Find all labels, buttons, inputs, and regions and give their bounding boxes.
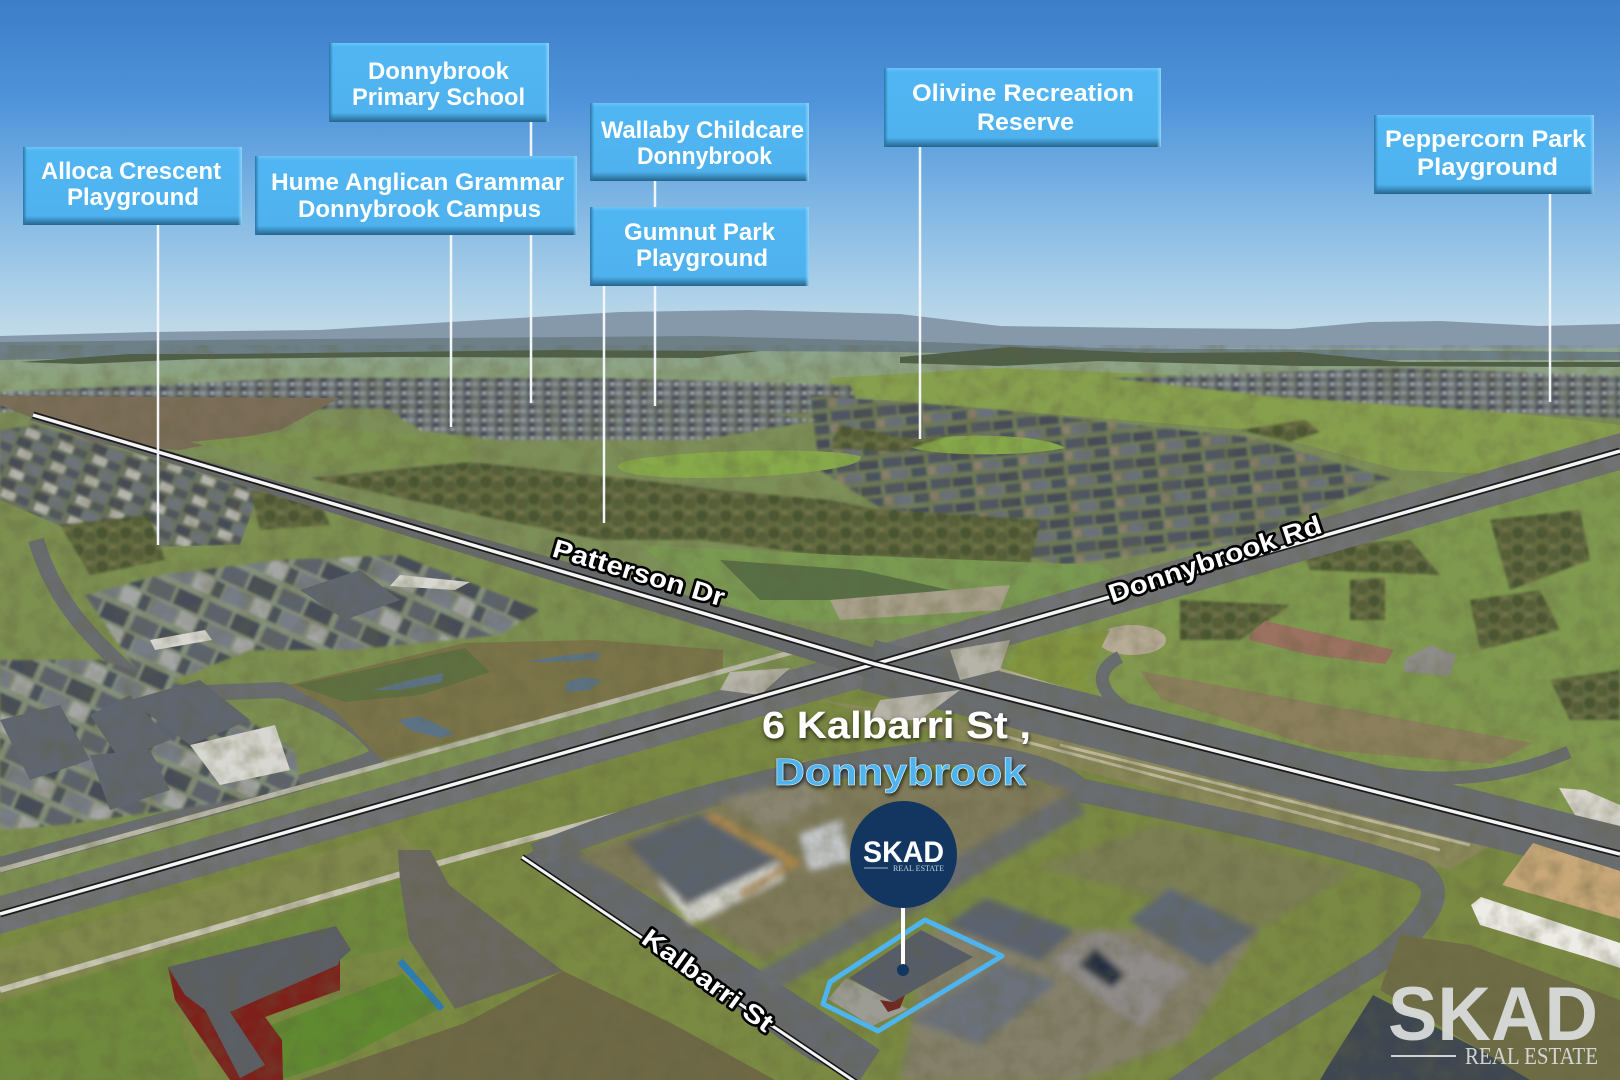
label: Hume Anglican Grammar	[255, 156, 577, 235]
Kalbarri St road	[522, 838, 880, 1080]
right field	[880, 450, 1620, 855]
school buildings	[380, 400, 820, 440]
far suburb right	[1110, 368, 1620, 418]
blurred white wall	[655, 861, 785, 925]
Donnybrook Rd dark kerb	[0, 451, 1620, 914]
line: Peppercorn	[1549, 194, 1551, 402]
lot lower	[900, 930, 1260, 1080]
Patterson Dr carriageway right	[860, 640, 1620, 880]
label: Hume Anglican Grammar: Hume Anglican Grammar	[271, 169, 564, 196]
houses roofs	[0, 570, 400, 810]
blurred fence	[710, 816, 795, 895]
address line 1: 6 Kalbarri St ,	[762, 705, 1031, 747]
grain	[0, 345, 1620, 1080]
cleared dirt	[0, 396, 340, 450]
blurred house A	[945, 898, 1075, 962]
Patterson Dr median	[33, 415, 1620, 854]
label: Alloca Crescent Playground: Alloca Crescent	[41, 158, 221, 185]
suburb cluster lower	[0, 660, 300, 830]
label: Donnybrook Primary School	[329, 43, 549, 122]
address title	[762, 705, 1031, 794]
trees along park	[310, 420, 1320, 565]
right wedge dirt lot	[1140, 671, 1533, 764]
pointer lines	[158, 122, 1550, 545]
location pin stem	[901, 905, 905, 966]
label: Donnybrook Primary School: Donnybrook	[368, 58, 510, 85]
ground base	[0, 400, 1620, 1080]
suburb street left	[0, 540, 380, 865]
parkland	[640, 545, 1120, 625]
label: Olivine Recreation Reserve	[884, 68, 1161, 147]
label: Olivine Recreation Reserve: Reserve	[977, 109, 1074, 136]
line: Hume	[450, 235, 452, 427]
park to right wedge	[1110, 470, 1620, 760]
watermark logo	[1388, 972, 1598, 1070]
label: Wallaby Childcare: Wallaby Childcare	[601, 117, 804, 144]
right field trees	[1180, 510, 1620, 720]
green field	[830, 368, 1620, 480]
wetland green	[295, 648, 490, 702]
label: Olivine Recreation Reserve: Olivine Recreation	[912, 80, 1134, 107]
line: Olivine	[919, 147, 921, 439]
blurred white building bit	[800, 820, 850, 870]
building lawn	[269, 974, 439, 1080]
label: Gumnut Park Playground	[590, 207, 809, 286]
lower left brown strip	[0, 830, 430, 1000]
red walls	[168, 950, 340, 1080]
blurred house D	[910, 962, 1058, 1045]
trees left cluster	[60, 490, 330, 575]
label: Peppercorn Park Playground: Peppercorn Park	[1385, 126, 1587, 153]
line: Wallaby	[654, 181, 656, 406]
distant tree lines	[20, 347, 1620, 367]
road label: Kalbarri St: Kalbarri St	[636, 923, 780, 1038]
ponds	[372, 652, 602, 738]
label: Wallaby Childcare	[590, 103, 809, 181]
badge wordmark: SKAD	[863, 836, 944, 869]
label: Alloca Crescent Playground: Playground	[67, 184, 199, 211]
upper left suburb	[0, 425, 260, 548]
top paddock	[190, 428, 480, 472]
gravel pad	[1098, 625, 1166, 655]
construction white building	[1471, 897, 1620, 968]
sports ovals	[618, 436, 1065, 478]
construction upper	[1559, 788, 1620, 826]
lawn lower left	[0, 880, 410, 1080]
line: Alloca	[157, 225, 159, 545]
Kalbarri St kerb	[522, 857, 860, 1080]
red building	[168, 926, 351, 1080]
bottom wedge ground	[0, 680, 1620, 1080]
road label: Patterson Dr: Patterson Dr	[549, 533, 728, 612]
footpath across verge	[0, 650, 800, 870]
label: Gumnut Park Playground: Gumnut Park	[624, 219, 776, 246]
subject red garage	[880, 995, 905, 1012]
strip above ring road	[820, 700, 1500, 870]
inner street	[760, 802, 1079, 985]
crossing concrete	[720, 640, 1010, 720]
suburb cluster upper	[85, 555, 540, 690]
lower right house roof	[1320, 995, 1530, 1080]
right wedge service road	[1102, 657, 1569, 778]
verge paths lower	[1000, 735, 1470, 850]
blurred roof top	[720, 780, 830, 830]
mid suburb	[810, 395, 1393, 565]
lower right lot	[1380, 935, 1620, 1080]
sky	[0, 0, 1620, 340]
footpath upper	[0, 764, 806, 990]
Patterson Dr carriageway left	[30, 413, 875, 680]
label: Donnybrook Primary School: Primary School	[352, 84, 525, 111]
small shed	[1404, 645, 1456, 676]
blurred house left	[625, 814, 778, 905]
Donnybrook Rd carriageway	[0, 433, 1620, 934]
parcel outline	[823, 920, 1002, 1031]
watermark wordmark: SKAD	[1388, 972, 1598, 1057]
badge divider	[864, 868, 888, 869]
park lake strip	[720, 560, 950, 600]
blurred house C	[1050, 930, 1190, 1028]
label: Hume Anglican Grammar: Donnybrook Campus	[298, 196, 541, 223]
address line 2: Donnybrook	[774, 752, 1027, 794]
construction timber frames	[1502, 843, 1620, 919]
label: Peppercorn Park Playground	[1374, 115, 1594, 194]
location pin dot	[897, 964, 909, 976]
label: Wallaby Childcare: Donnybrook	[637, 143, 773, 170]
park entry flags	[830, 585, 1010, 620]
farmland	[0, 348, 1620, 408]
badge sub text: REAL ESTATE	[893, 863, 944, 873]
ring road	[535, 752, 1433, 1080]
Kalbarri St median	[522, 857, 860, 1080]
verge paths	[1000, 670, 1400, 790]
watermark sub text: REAL ESTATE	[1465, 1044, 1598, 1070]
label: Alloca Crescent Playground	[23, 147, 242, 225]
watermark divider	[1391, 1055, 1456, 1057]
subject house roof	[849, 930, 973, 1002]
subject concrete	[828, 978, 908, 1026]
suburb white rows	[150, 575, 470, 785]
label: Peppercorn Park Playground: Playground	[1417, 154, 1558, 181]
brown lot	[300, 971, 775, 1080]
right wedge verge lawn	[1000, 630, 1120, 720]
label: Gumnut Park Playground: Playground	[636, 245, 768, 272]
block lot left	[575, 770, 1075, 960]
far suburb left	[0, 378, 860, 420]
left wedge lawn	[0, 492, 875, 930]
blurred solar	[1079, 947, 1125, 988]
distant hills	[0, 310, 1620, 368]
gravel parking	[398, 850, 563, 1009]
road label: Donnybrook Rd: Donnybrook Rd	[1104, 509, 1325, 609]
Patterson Dr dark kerb	[33, 415, 1620, 854]
blurred properties	[575, 770, 1357, 1080]
Donnybrook Rd median	[0, 451, 1620, 914]
farm sheds	[1249, 621, 1394, 664]
grey roof	[168, 926, 351, 1078]
lot green	[1037, 823, 1357, 930]
logo badge	[850, 801, 957, 908]
wetland	[289, 640, 723, 760]
blue fence	[400, 961, 442, 1009]
line: Gumnut	[603, 286, 605, 523]
blurred house B	[1128, 888, 1258, 968]
line: Primary School	[530, 122, 532, 403]
